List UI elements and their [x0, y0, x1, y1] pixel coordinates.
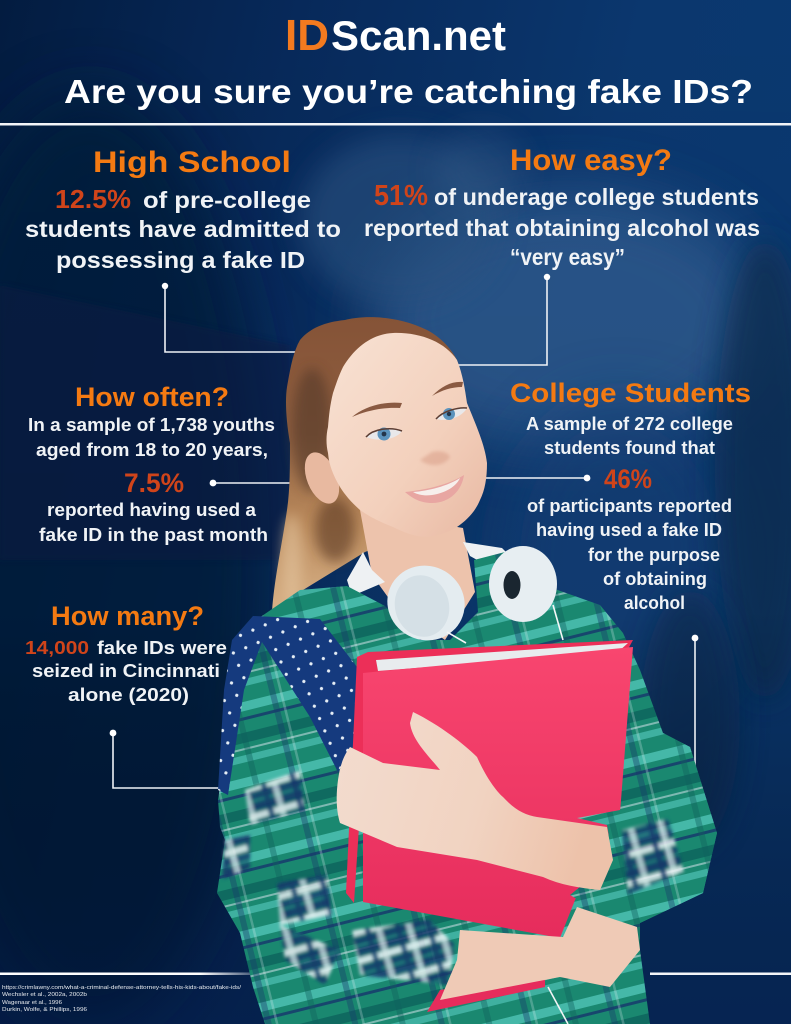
connector: how easy	[455, 274, 550, 365]
panel: how easy stat: How easy?	[510, 144, 672, 177]
panel: how often stat: aged from 18 to 20 years,	[36, 440, 268, 460]
panel: how many stat: fake IDs were	[97, 638, 227, 658]
panel: how often stat: In a sample of 1,738 youths	[28, 415, 275, 435]
folder	[346, 640, 633, 1012]
panel: college students stat: College Students	[510, 378, 751, 408]
backpack strap	[218, 616, 357, 795]
connector: high school	[162, 283, 300, 352]
panel: how easy stat: reported that obtaining alcohol was	[364, 215, 760, 241]
ear	[298, 447, 346, 509]
panel: college students stat	[510, 378, 751, 613]
panel: high school stat: possessing a fake ID	[56, 247, 305, 273]
connector: how often	[210, 480, 292, 486]
panel: how often stat	[28, 382, 275, 545]
sources: Wagenaar et al., 1996	[2, 1000, 62, 1006]
hair	[272, 317, 470, 612]
neck	[360, 510, 475, 640]
white collar	[347, 542, 520, 596]
right eye	[436, 408, 467, 420]
panel: college students stat: of obtaining	[603, 569, 707, 589]
nose shadow	[420, 451, 450, 465]
logo: ID	[285, 11, 329, 60]
panel: how often stat: reported having used a	[47, 500, 257, 520]
connector: college students	[484, 475, 590, 481]
panel: how often stat: 7.5%	[124, 468, 184, 498]
top divider line	[0, 123, 791, 126]
panel: how many stat: alone (2020)	[68, 685, 189, 705]
lower hand and forearm	[440, 907, 640, 1000]
panel: how often stat: fake ID in the past month	[39, 525, 268, 545]
panel: high school stat: of pre-college	[143, 187, 311, 213]
panel: college students stat: for the purpose	[588, 545, 720, 565]
illustration: student holding a pink folder	[217, 317, 717, 1024]
title: Are you sure you’re catching fake IDs?	[64, 73, 753, 110]
connector: how many	[110, 730, 222, 788]
panel: how easy stat: of underage college students	[434, 184, 759, 210]
panel: college students stat: 46%	[604, 464, 652, 494]
panel: high school stat: students have admitted to	[25, 216, 341, 242]
panel: high school stat: High School	[93, 146, 291, 179]
right sleeve check	[622, 818, 684, 894]
panel: high school stat: 12.5%	[55, 184, 131, 214]
panel: how many stat: seized in Cincinnati	[32, 661, 220, 681]
panel: how often stat: How often?	[75, 382, 229, 412]
left eye	[366, 428, 402, 440]
connector: right side	[692, 635, 698, 790]
panel: how easy stat: 51%	[374, 180, 428, 212]
bottom divider lines	[0, 972, 791, 975]
panel: how many stat: How many?	[51, 601, 204, 631]
panel: college students stat: students found that	[544, 438, 715, 458]
earphone cord	[548, 987, 568, 1024]
headphones	[375, 546, 563, 653]
upper hand and forearm	[337, 712, 613, 890]
panel: how easy stat	[364, 144, 760, 270]
panel: college students stat: A sample of 272 college	[526, 414, 733, 434]
panel: how many stat: 14,000	[25, 638, 89, 658]
face	[326, 333, 487, 537]
panel: college students stat: of participants reported	[527, 496, 732, 516]
right eyebrow	[432, 382, 463, 396]
right sleeve	[570, 733, 717, 923]
panel: how easy stat: “very easy”	[510, 244, 625, 270]
sources: Wechsler et al., 2002a, 2002b	[2, 992, 87, 998]
sleeve plaid patches	[222, 770, 712, 985]
sources: https://crimlawny.com/what-a-criminal-defense-attorney-tells-his-kids-about/fake-ids/	[2, 985, 242, 991]
panel: college students stat: having used a fake ID	[536, 520, 722, 540]
logo: Scan.net	[331, 12, 506, 59]
panel: high school stat	[25, 146, 341, 273]
plaid shirt body	[217, 552, 717, 1024]
left eyebrow	[352, 403, 402, 417]
panel: how many stat	[25, 601, 227, 705]
sources	[2, 985, 242, 1013]
smile	[405, 475, 464, 503]
panel: college students stat: alcohol	[624, 593, 685, 613]
sources: Durkin, Wolfe, & Phillips, 1996	[2, 1007, 87, 1013]
